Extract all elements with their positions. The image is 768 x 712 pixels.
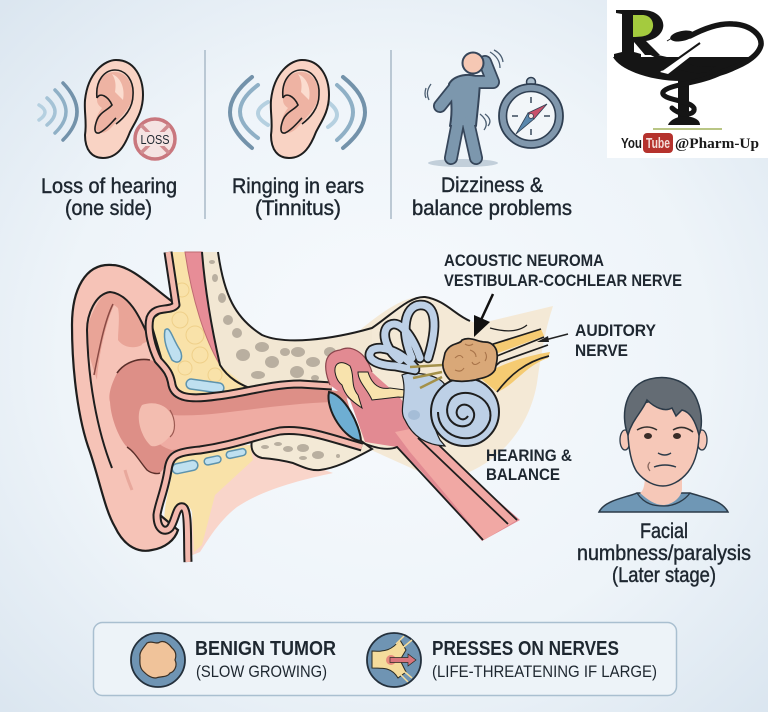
- cochlea: [408, 378, 499, 446]
- label: facial numbness: (Later stage): [612, 563, 716, 587]
- icon: ear with fading sound waves: [39, 60, 143, 158]
- head tissue below canal: [190, 445, 333, 556]
- icon: presses on nerves: [367, 633, 421, 687]
- tumor: [443, 339, 497, 382]
- arrow to tumor: [474, 294, 493, 337]
- canal wall lower: [157, 430, 362, 562]
- ear anatomy diagram: [72, 252, 682, 562]
- label: loss of hearing: (one side): [65, 196, 152, 220]
- label: acoustic neuroma: VESTIBULAR-COCHLEAR NERVE: [444, 272, 682, 290]
- icon: dizzy figure: [425, 50, 503, 167]
- label: auditory nerve: AUDITORY: [575, 322, 656, 340]
- label: benign tumor: BENIGN TUMOR: [195, 638, 336, 660]
- label: ringing in ears: Ringing in ears: [232, 174, 364, 198]
- canal wall upper: [149, 252, 332, 398]
- label: auditory nerve: NERVE: [575, 342, 628, 360]
- ear canal and concha: [109, 360, 360, 474]
- symptom: dizziness: [412, 50, 572, 220]
- icon: face portrait: [599, 378, 728, 512]
- arrow to auditory nerve: [537, 334, 568, 342]
- label: acoustic neuroma: ACOUSTIC NEUROMA: [444, 252, 604, 270]
- label: facial numbness: numbness/paralysis: [577, 541, 751, 565]
- symptom: loss of hearing: [39, 60, 177, 220]
- lower fat layer: [164, 445, 253, 552]
- label: benign tumor: (SLOW GROWING): [196, 663, 327, 681]
- upper skull bone: [202, 252, 470, 388]
- logo: Rx YouTube Pharm-Up: @Pharm-Up: [675, 136, 759, 152]
- ossicles: [335, 363, 406, 408]
- logo: Rx YouTube Pharm-Up: [607, 0, 768, 158]
- label: ringing in ears: (Tinnitus): [255, 196, 341, 220]
- lower bone: [251, 428, 372, 470]
- label: presses on nerves: PRESSES ON NERVES: [432, 638, 619, 660]
- label: facial numbness: Facial: [640, 519, 688, 543]
- nerve fibres: [410, 365, 443, 388]
- outer ear pinna: [72, 265, 178, 551]
- icon: ear with ringing waves: [230, 60, 365, 158]
- upper fat layer and muscle: [150, 252, 255, 396]
- panel: key facts: [94, 622, 676, 696]
- symptom: tinnitus: [230, 60, 365, 220]
- icon: compass: [499, 78, 563, 148]
- icon: loss badge: [135, 119, 175, 159]
- vestibule: [402, 373, 445, 446]
- label: hearing and balance: HEARING &: [486, 447, 572, 465]
- logo: Rx YouTube Pharm-Up: Tube: [646, 135, 670, 152]
- label: presses on nerves: (LIFE-THREATENING IF LARGE): [432, 663, 657, 681]
- nerve bundle: [480, 329, 550, 392]
- icon: benign tumor: [131, 633, 185, 687]
- icon: loss badge: LOSS: [140, 132, 170, 147]
- eardrum: [328, 392, 361, 441]
- label: dizziness and balance problems: balance problems: [412, 196, 572, 220]
- symptom: facial numbness: [577, 378, 751, 587]
- label: loss of hearing: Loss of hearing: [41, 174, 177, 198]
- logo: Rx YouTube Pharm-Up: You: [621, 135, 642, 152]
- label: hearing and balance: BALANCE: [486, 466, 560, 484]
- label: dizziness and balance problems: Dizziness &: [441, 173, 543, 197]
- semicircular canals: [370, 305, 434, 370]
- inner ear halo background: [360, 297, 553, 481]
- middle ear cavity and Eustachian tube: [326, 348, 520, 541]
